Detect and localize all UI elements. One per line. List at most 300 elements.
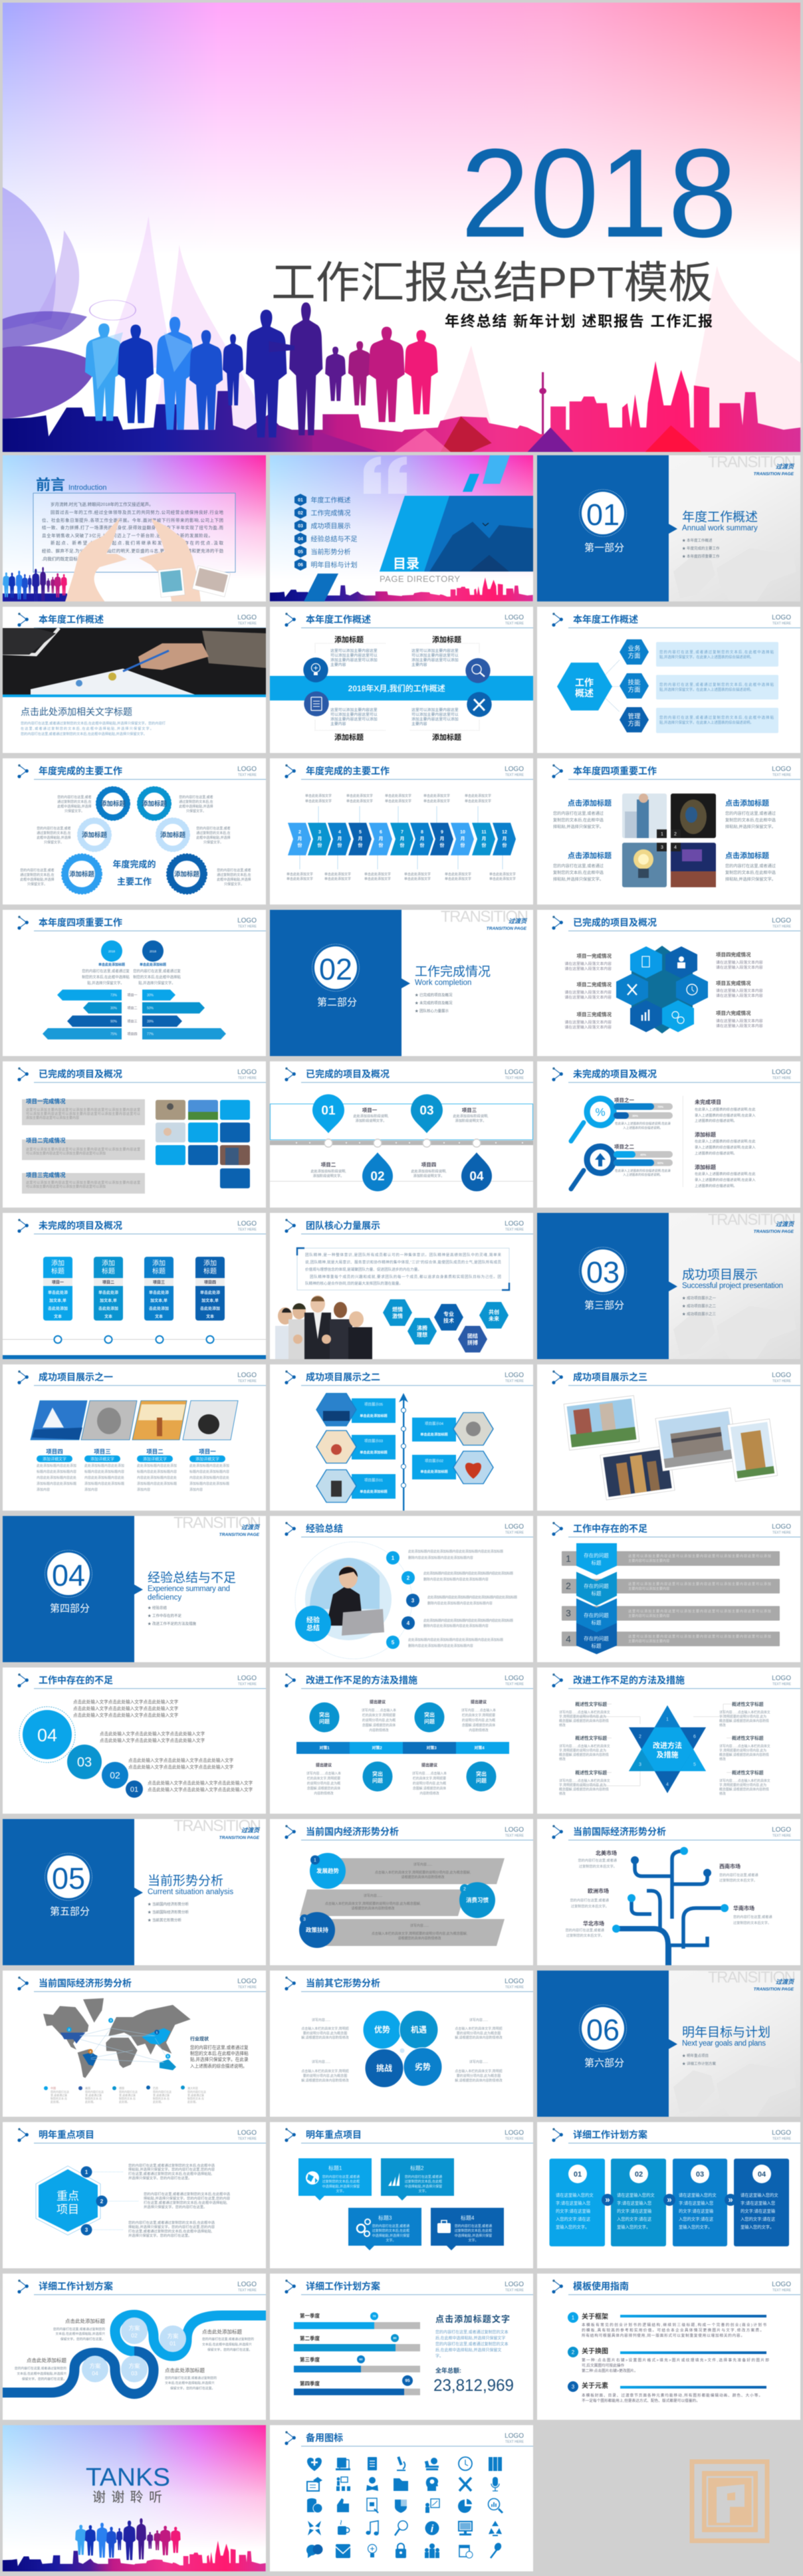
step connectors: » xyxy=(667,2195,672,2204)
header: 明年重点项目 xyxy=(306,2129,362,2140)
header: 详细工作计划方案 xyxy=(306,2281,380,2292)
month chevrons: 份 xyxy=(460,842,465,848)
header xyxy=(552,1067,800,1083)
header: LOGO xyxy=(772,2129,791,2137)
accent bars xyxy=(463,455,510,492)
six point star: 3 xyxy=(639,1763,641,1767)
header: LOGO xyxy=(237,1372,257,1379)
plan notes: 您的内容打在这里,或者通过复制您的 xyxy=(202,2337,254,2341)
plan circle labels: 方案 xyxy=(167,2333,179,2339)
grey text blocks: 这里可以添加主要内容这里可以添加主要内容这里可以添加主要内容这里 xyxy=(26,1107,140,1113)
guide section three: 3 xyxy=(572,2384,575,2390)
side copy: 只保留文字。 xyxy=(64,809,84,813)
right notes: 详写内容......点击输入本栏的具体文 xyxy=(719,1710,770,1715)
plan columns: 入您的文字;请在这 xyxy=(617,2216,652,2222)
section text 05: ★ 当前国内经济形势分析 xyxy=(148,1901,189,1907)
bar numbers: 2 xyxy=(566,1580,571,1591)
right captions: 请在这里输入段落文本内容 xyxy=(716,965,763,970)
icon: binders xyxy=(489,2457,502,2471)
task copy: 复制您的文本后,在此框中选 xyxy=(553,817,604,823)
core value hexagons: 共创 xyxy=(489,1309,499,1315)
right notes: 修改 xyxy=(719,1792,726,1796)
slide: spare icons xyxy=(270,2425,533,2571)
bar copy: 这里可以添加主要内容这里可以添加主要内容这里可以添加主要内容这里可以添加 xyxy=(628,1581,771,1586)
header: LOGO xyxy=(505,2281,524,2288)
section text 02: 工作完成情况 xyxy=(415,964,491,979)
slide: template guide xyxy=(537,2274,800,2420)
description boxes: 贴,并选择只保留文字。在此录入上述图表的综合描述说明。 xyxy=(659,654,754,659)
numbered dots: 2 xyxy=(407,1575,410,1581)
plan columns: 请在这里输入您的文 xyxy=(741,2192,778,2198)
body copy xyxy=(330,648,459,726)
left notes: 字,简明扼要的说明分项内容,此为 xyxy=(559,1782,606,1788)
right notes xyxy=(719,1701,770,1796)
project tags: 项目展示04 xyxy=(425,1422,443,1426)
month captions: 单击此处添加文字 xyxy=(445,872,471,877)
header: LOGO xyxy=(505,1372,524,1379)
header xyxy=(552,916,800,931)
task titles: 点击添加标题 xyxy=(725,851,769,860)
left notes: 字,简明扼要的说明分项内容,此为 xyxy=(559,1715,606,1719)
milestone captions: 项目三 xyxy=(462,1107,477,1113)
contents label xyxy=(380,556,460,584)
sub hexagons xyxy=(620,639,649,732)
right notes: 详写内容......点击输入本栏的具体文 xyxy=(719,1778,770,1783)
callout cards: 中选择粘贴,并选择只保留 xyxy=(455,2233,492,2238)
section text 05: 当前形势分析 xyxy=(148,1874,223,1888)
slide: team strength xyxy=(270,1213,533,1359)
right notes: 概述性文字标题 xyxy=(732,1735,764,1741)
world map: 2 xyxy=(68,2028,70,2031)
slide: unfinished columns xyxy=(3,1213,266,1359)
body copy: 主要内容 xyxy=(330,662,346,667)
SWOT copy: 解,请根据您的具体内容酌情修改 xyxy=(301,2078,349,2083)
body copy: 主要内容 xyxy=(411,662,427,667)
suggestion copy: 念图解,请根据您的具体 xyxy=(307,1786,340,1790)
six point star: 及措施 xyxy=(657,1750,678,1759)
side summary: 23,812,969 xyxy=(433,2377,514,2395)
item copy: 此处添加标题内容此处添加标题内容此处添加标题内容此处添加标题 xyxy=(423,1618,513,1623)
world map: 5 xyxy=(167,2055,169,2058)
header xyxy=(17,613,266,628)
month chevrons: 份 xyxy=(358,842,363,848)
suggestion copy: 详写内容......点击输入本 xyxy=(362,1708,396,1713)
diverging bars: 39% xyxy=(147,1020,154,1023)
slide: preface xyxy=(3,455,266,601)
side copy: 只保留文字。 xyxy=(186,809,206,813)
market labels xyxy=(565,1850,772,1938)
icon grid xyxy=(306,2456,503,2558)
icon: pie chart xyxy=(458,2499,472,2513)
header: 当前国际经济形势分析 xyxy=(573,1826,666,1837)
plan columns: 请在这里输入您的文 xyxy=(556,2192,594,2198)
month captions xyxy=(287,794,516,881)
industry status note: 您的内容打在这里,或者通过复 xyxy=(190,2044,249,2050)
project captions: 内容此处添加标题内容此处 xyxy=(84,1475,124,1480)
month captions: 单击此处添加文字 xyxy=(465,794,491,798)
task titles xyxy=(568,798,769,860)
slide: key projects hexagon xyxy=(3,2122,266,2268)
column copy: 贴,并选择只保留文字。 xyxy=(87,980,124,986)
suggestion copy: 内容酌情修改 xyxy=(314,1791,334,1796)
month captions: 单击此处添加文字 xyxy=(489,872,516,877)
callout cards: 文字。 xyxy=(418,2189,429,2193)
month captions: 单击此处添加文字 xyxy=(423,799,450,804)
column copy: 单击此处添加标题 xyxy=(98,962,125,967)
project captions: 此处添加标题内容此处添加 xyxy=(84,1463,124,1468)
four columns: 加文本,单 xyxy=(100,1298,117,1303)
left captions: 请在这里输入段落文本内容 xyxy=(564,966,612,972)
centre caption: 年度完成的 xyxy=(112,859,156,869)
side summary: 全年总额: xyxy=(435,2367,461,2374)
header: LOGO xyxy=(772,1523,791,1531)
header: LOGO xyxy=(505,1675,524,1682)
sub hexagons: 管理 xyxy=(628,712,641,720)
header: TEXT HERE xyxy=(238,1380,257,1384)
circle copy: 点击此处输入文字点击此处输入文字点击此处输入文字 xyxy=(100,1737,205,1743)
plan notes: 您的内容打在这里,或者通过复制您的 xyxy=(15,2366,66,2371)
project captions: 项目四 xyxy=(46,1448,63,1455)
ribbon copy: 详写内容...... xyxy=(410,1923,429,1928)
map legend: 您的内容打在这 xyxy=(187,2090,206,2093)
preface text box: 回首过去一年的工作,经过全体领导及员工的共同努力,公司经营业绩保持良好,行业地 xyxy=(51,509,223,515)
titles: 添加标题 xyxy=(432,635,461,644)
four columns: 击此处添加 xyxy=(200,1306,220,1311)
circle copy: 点击此处输入文字点击此处输入文字点击此处输入文字 xyxy=(73,1705,179,1711)
header: LOGO xyxy=(772,2281,791,2288)
side summary: 字。 xyxy=(435,2353,443,2359)
project captions: 标题内容此处添加标题内容 xyxy=(37,1469,76,1474)
project captions: 此处添加标题内容此处添加 xyxy=(37,1463,76,1468)
blue panel 01: 第一部分 xyxy=(584,542,624,554)
side copy: 您的内容打在这里,或者 xyxy=(217,868,251,873)
contents skyline xyxy=(270,574,533,601)
side copy: 通过复制您的文本后,在 xyxy=(37,831,71,835)
right column notes: 上述图表的综合描述说明。 xyxy=(695,1150,737,1156)
cover year: 2018 xyxy=(461,123,737,264)
project copy: 打在这里,或者通过复制您的文本后,在此框中选择粘贴, xyxy=(128,2171,212,2176)
four columns: 添加 xyxy=(152,1259,166,1267)
slide: annual summary photo xyxy=(3,607,266,753)
market labels: 您的内容打在这里,或者通 xyxy=(719,1872,758,1878)
grey text blocks: 可以添加主要内容这里可以添加主要内容这里可以添加主要内容这里可以 xyxy=(26,1111,140,1117)
plan columns: 字;请在这里输入您 xyxy=(556,2200,590,2206)
numbered badges: 3 xyxy=(85,2227,88,2233)
map legend: 美国 xyxy=(85,2086,90,2090)
slide: shortcomings circles xyxy=(3,1667,266,1814)
item copy: 删除内容此处添加标题内容此处添加标题内容 xyxy=(427,1601,493,1606)
grey text blocks: 可以添加主要内容这里可以添加主要内容这里可以添加 xyxy=(26,1151,106,1156)
month chevrons: 月 xyxy=(379,836,383,841)
task copy: 择粘贴,并选择只保留文字。 xyxy=(725,824,776,829)
month chevrons: 份 xyxy=(503,842,507,848)
core value hexagons: 技术 xyxy=(443,1317,454,1324)
callout cards: 标题4 xyxy=(461,2214,475,2221)
icon: folder xyxy=(394,2478,408,2491)
icon: team xyxy=(425,2543,439,2558)
numbered badges xyxy=(81,2167,138,2236)
project tags: 单击此处添加标题 xyxy=(360,1413,388,1418)
month chevrons: 月 xyxy=(420,836,424,841)
section text 03: 成功项目展示 xyxy=(682,1267,758,1282)
plan notes: 保留文字。您的内容打在这里。 xyxy=(60,2337,105,2341)
contents list: 02 xyxy=(298,511,303,516)
blue panel 06 xyxy=(537,1971,677,2117)
SWOT copy: 解,请根据您的具体内容酌情修改 xyxy=(455,2035,503,2040)
water drop markers: 03 xyxy=(419,1104,434,1118)
month chevrons: 份 xyxy=(481,842,487,848)
right column notes: 添加标题 xyxy=(695,1131,716,1138)
header xyxy=(285,1522,533,1537)
header: 成功项目展示之三 xyxy=(573,1372,647,1382)
column copy: 您的内容打在这里,或者通过复 xyxy=(133,968,181,974)
month captions: 单击此处添加文字 xyxy=(287,877,313,881)
right notes: 字,简明扼要的说明分项内容,此为 xyxy=(719,1715,766,1719)
headline and copy xyxy=(21,706,166,736)
team text frame: 队精神的核心是合作协同,目的是最大发挥团队的潜在能量。 xyxy=(305,1281,403,1286)
header: LOGO xyxy=(505,2129,524,2137)
blue panel 05: 05 xyxy=(52,1862,85,1895)
month captions: 单击此处添加文字 xyxy=(364,872,391,877)
column copy xyxy=(82,962,181,986)
header: 本年度工作概述 xyxy=(573,614,638,625)
task copy: 您的内容打在这里,或者通过 xyxy=(553,811,604,816)
month captions: 单击此处添加文字 xyxy=(364,877,391,881)
body copy: 这里可以添加主要内容这里 xyxy=(411,707,459,712)
milestone captions: 添加阶段说明文字。 xyxy=(313,1173,344,1178)
item copy xyxy=(408,1549,517,1648)
blue panel 01: 01 xyxy=(586,498,620,532)
guide section two: 第一种:点击图片右键>设置图片格式>填充>图片或纹理填充>文件,选择事先准备好的图片即 xyxy=(582,2357,769,2363)
month captions: 单击此处添加文字 xyxy=(346,794,373,798)
right column notes: 添加标题 xyxy=(695,1164,716,1170)
ring labels: 添加标题 xyxy=(160,831,185,839)
four columns: 单击此处添 xyxy=(200,1290,220,1295)
hex photos xyxy=(316,1393,493,1502)
right captions: 项目四完成情况 xyxy=(716,951,751,958)
icon: chat bubbles xyxy=(306,2544,323,2558)
suggestion copy: 提出建议 xyxy=(421,1763,437,1768)
suggestion copy xyxy=(306,1699,496,1796)
SWOT copy: 要的说明分项内容,此为概念图 xyxy=(457,2031,501,2036)
plan columns: 01 xyxy=(574,2171,582,2179)
preface text box: 且全年销售收入突破了3亿元,让公司迈上了一个新台阶,进入了一个新的发展阶段。 xyxy=(42,532,213,538)
team text frame: 说,团队精神,就是大局意识、服务意识和协作精神的集中体现,“三识”的综合体,能使团队成员的士气,是团队所有成员 xyxy=(305,1259,501,1265)
header: 当前国际经济形势分析 xyxy=(39,1978,132,1988)
right notes: 字,简明扼要的说明分项内容,此为 xyxy=(719,1748,766,1753)
side copy: 通过复制您的文本后,在 xyxy=(20,873,55,877)
project captions: 添加标题内容此处添加标题 xyxy=(137,1481,177,1486)
quarter bars: 80 xyxy=(393,2337,397,2339)
icon: microscope xyxy=(397,2456,405,2470)
suggestion copy: 提出建议 xyxy=(316,1763,332,1768)
project copy: 您的内容打在这里,或者通过复制您的文本后,在此框中选 xyxy=(128,2220,215,2225)
map legend: 制您的文本,在 xyxy=(85,2096,102,2100)
guide section three: 本模板封面、目录、过渡章节页面各种元素均能移动,所有图形都能编辑动画、颜色、大小等。 xyxy=(582,2393,762,2398)
preface text box: 岁月流转,时光飞逝,转眼间2018年的工作又接近尾声。 xyxy=(51,501,154,507)
slide: annual summary hexagons xyxy=(537,607,800,753)
month captions: 单击此处添加文字 xyxy=(287,872,313,877)
header xyxy=(285,1825,533,1840)
right column notes: 录入上述图表的综合描述说明,在此录入 xyxy=(695,1177,756,1182)
header: 成功项目展示之一 xyxy=(39,1372,113,1382)
callout cards: 过复制您的文本后,在此框 xyxy=(455,2228,492,2233)
contents list: 01 xyxy=(298,498,303,502)
quarter bars: 60 xyxy=(359,2358,363,2361)
side summary: 您的内容打在这里,或者通过复制您的文本 xyxy=(435,2341,509,2347)
chevron stack: 标题 xyxy=(592,1619,602,1626)
guide section two: 2 xyxy=(572,2349,575,2355)
ribbon copy: 请根据您的具体内容酌情修改 xyxy=(398,1936,441,1941)
suggestion copy: 详写内容......点击输入本 xyxy=(412,1771,447,1776)
core value hexagons: 专业 xyxy=(443,1311,454,1317)
team text frame: 团队精神尊重每个成员的兴趣和成就,要求团队的每一个成员,都以追求自身素质和实现团队目标为己任。团 xyxy=(310,1274,501,1279)
market labels: 过复制您的文本后文字。 xyxy=(566,1933,604,1938)
plan columns: 02 xyxy=(635,2171,643,2179)
callout cards: 文字。 xyxy=(336,2189,346,2193)
icon: clipboard xyxy=(368,2457,377,2470)
progress bars: 入上述图表的综合描述说明。 xyxy=(623,1126,663,1130)
project tags: 单击此处添加标题 xyxy=(420,1469,449,1474)
team photo xyxy=(275,1295,372,1359)
header: 年度完成的主要工作 xyxy=(306,766,390,776)
right notes: 概念图解,请根据您的具体内容酌情 xyxy=(719,1753,769,1757)
section text 04: ★ 经验总结 xyxy=(148,1605,168,1610)
plan columns: 的文字;请在这里输 xyxy=(679,2208,714,2214)
core value hexagons: 沸腾 xyxy=(417,1325,427,1331)
body copy: 这里可以添加主要内容这里 xyxy=(330,648,378,653)
topic circles: 政策扶持 xyxy=(306,1927,328,1933)
grey text blocks: 项目二完成情况 xyxy=(26,1137,66,1144)
item copy: 删除内容此处添加标题内容此处添加标题内容 xyxy=(423,1577,489,1582)
quarter bars: 第二季度 xyxy=(300,2335,320,2341)
header: TEXT HERE xyxy=(505,1986,524,1990)
market labels: 您的内容打在这里,或者通 xyxy=(565,1927,605,1933)
callout cards: 您的内容打在这里,或者通 xyxy=(372,2224,409,2228)
transition label: TRANSITION xyxy=(708,1969,796,1986)
centre caption xyxy=(112,859,156,887)
milestone captions: 添加阶段说明文字。 xyxy=(356,1118,386,1123)
blue picture panel xyxy=(380,496,533,572)
header: LOGO xyxy=(237,917,257,924)
header: LOGO xyxy=(505,1523,524,1531)
slide: completed hex ring xyxy=(537,910,800,1056)
strategy bar: 对策1 xyxy=(319,1745,330,1751)
section text 01: Annual work summary xyxy=(682,524,758,532)
key hexagon: 重点 xyxy=(57,2190,79,2202)
section text 05: ★ 当前其它形势分析 xyxy=(148,1917,182,1923)
suggestion copy: 念图解,请根据您的具体 xyxy=(413,1786,446,1790)
month chevrons: 月 xyxy=(460,836,465,841)
bar copy: 主要内容可以添加主要内容 xyxy=(628,1613,669,1618)
SWOT copy: 要的说明分项内容,此为概念图 xyxy=(303,2074,347,2078)
problem circles: 突出 xyxy=(372,1771,383,1777)
header: TEXT HERE xyxy=(772,2289,792,2293)
slide: improvement measures timeline xyxy=(270,1667,533,1814)
header: LOGO xyxy=(505,1978,524,1985)
suggestion copy: 内容酌情修改 xyxy=(469,1728,489,1733)
section text 04: Experience summary and xyxy=(148,1585,230,1593)
photo grid: 4 xyxy=(674,845,677,850)
month chevrons: 12 xyxy=(502,830,507,835)
transition label: TRANSITION PAGE xyxy=(754,472,794,477)
progress bars: 在此录入上述图表的综合描述说明,在此录 xyxy=(615,1121,671,1126)
topic circles: 发展趋势 xyxy=(316,1868,339,1874)
plan notes: 文本后,在此框中选择粘贴,并选择只 xyxy=(17,2371,66,2376)
plan notes: 点击此处添加标题 xyxy=(27,2357,66,2363)
key hexagon: 项目 xyxy=(57,2203,79,2216)
task titles: 点击添加标题 xyxy=(568,798,612,807)
header xyxy=(285,1370,533,1386)
side copy: 您的内容打在这里,或者 xyxy=(37,826,71,831)
icon: chart presenter xyxy=(425,2499,439,2513)
header: 本年度工作概述 xyxy=(39,614,104,625)
key hexagon xyxy=(36,2166,100,2235)
slide: success projects one xyxy=(3,1364,266,1511)
right notes: 概述性文字标题 xyxy=(732,1769,764,1776)
icon: microphone xyxy=(491,2477,499,2491)
header: TEXT HERE xyxy=(772,774,792,778)
cover gradient background xyxy=(3,3,800,452)
header xyxy=(552,1825,800,1840)
project tags xyxy=(352,1398,456,1499)
month captions: 单击此处添加文字 xyxy=(489,877,516,881)
progress bars: 项目之一 xyxy=(614,1097,634,1103)
plan notes: 您的内容打在这里,或者通过复制您的 xyxy=(53,2327,105,2331)
quarter bars xyxy=(294,2312,420,2395)
header xyxy=(17,1067,266,1083)
descending circles: 04 xyxy=(37,1725,57,1745)
plan circle labels: 方案 xyxy=(128,2363,140,2369)
bar copy xyxy=(628,1553,771,1644)
plan circle labels: 方案 xyxy=(89,2363,101,2369)
callout cards: 中选择粘贴,并选择只保留 xyxy=(372,2233,409,2238)
side copy: 此框中选择粘贴,并选择 xyxy=(179,804,213,809)
month captions: 单击此处添加文字 xyxy=(404,872,431,877)
header xyxy=(552,613,800,628)
icon: laptop xyxy=(336,2458,350,2470)
four columns: 击此处添加 xyxy=(149,1306,169,1311)
market labels: 过复制您的文本后文字。 xyxy=(571,1903,609,1909)
header xyxy=(552,1522,800,1537)
world map xyxy=(43,1998,191,2078)
left captions: 请在这里输入段落文本内容 xyxy=(564,990,612,995)
six point star: 改进方法 xyxy=(653,1741,682,1750)
slide: transition 06 xyxy=(537,1969,800,2117)
market labels: 您的内容打在这里,或者通 xyxy=(733,1914,772,1919)
column copy: 您的内容打在这里,或者通过复 xyxy=(82,968,130,974)
bar copy: 这里可以添加主要内容这里可以添加主要内容这里可以添加主要内容这里可以添加 xyxy=(628,1608,771,1614)
bar copy: 主要内容可以添加主要内容 xyxy=(628,1558,669,1563)
month chevrons: 9 xyxy=(441,830,443,835)
task titles: 点击添加标题 xyxy=(568,851,612,860)
header: 已完成的项目及概况 xyxy=(39,1069,122,1079)
slide: main work gears xyxy=(3,758,266,905)
diverging bars: 50% xyxy=(147,1006,154,1010)
header: LOGO xyxy=(772,1372,791,1379)
map legend: 此处理。 xyxy=(153,2099,164,2103)
blue panel 01 xyxy=(537,455,677,601)
six point star xyxy=(629,1705,706,1793)
sub hexagons: 方面 xyxy=(628,686,641,694)
blue panel 06: 06 xyxy=(586,2013,620,2047)
desk photo xyxy=(3,628,266,697)
task copy: 择粘贴,并选择只保留文字。 xyxy=(725,877,776,882)
circle copy: 点击此处输入文字点击此处输入文字点击此处输入文字 xyxy=(128,1764,234,1770)
market labels: 您的内容打在这里,或者通 xyxy=(578,1858,618,1863)
header: LOGO xyxy=(772,766,791,773)
callout cards: 标题1 xyxy=(328,2165,342,2171)
